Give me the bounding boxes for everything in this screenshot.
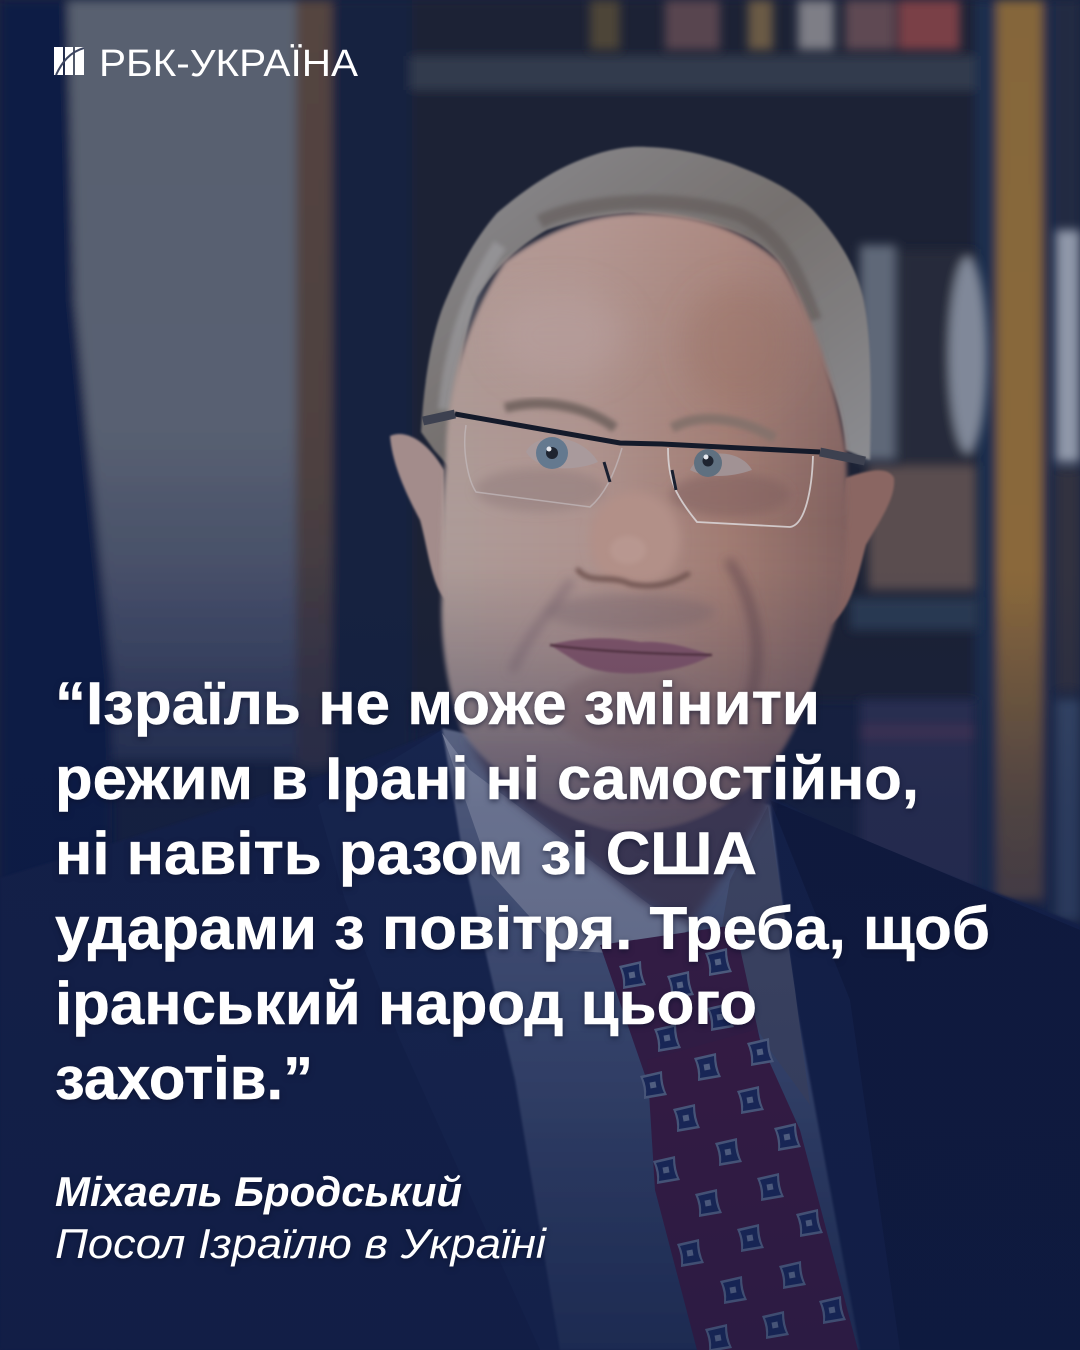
facial shading [475,468,790,750]
hair [421,147,871,470]
attribution: Посол Ізраїлю в Україні [55,1220,548,1267]
quote text: “Ізраїль не може змінити [55,670,820,737]
bookshelf blurred books [590,0,1080,920]
eyebrows [505,404,775,438]
quote text: ні навіть разом зі США [55,820,757,887]
face [441,214,847,830]
quote text: іранський народ цього [55,970,757,1037]
shirt and collar [442,728,860,1350]
logo wordmark: РБК-УКРАЇНА [99,43,359,85]
attribution [55,1168,548,1267]
ears [390,434,894,625]
logo: РБК-Україна [54,43,359,85]
quote text: захотів.” [55,1045,313,1112]
nose [578,536,688,586]
eyes [526,437,752,477]
neck shadow [462,735,772,925]
mouth [550,638,712,674]
necktie [600,925,858,1350]
quote text: режим в Ірані ні самостійно, [55,745,919,812]
quote text: ударами з повітря. Треба, щоб [55,895,990,962]
quote text [55,670,990,1112]
jacket [0,728,1080,1350]
attribution: Міхаель Бродський [55,1168,462,1215]
glasses [423,414,865,527]
icon: logo bars [54,47,84,75]
soft forehead shading [495,285,795,405]
